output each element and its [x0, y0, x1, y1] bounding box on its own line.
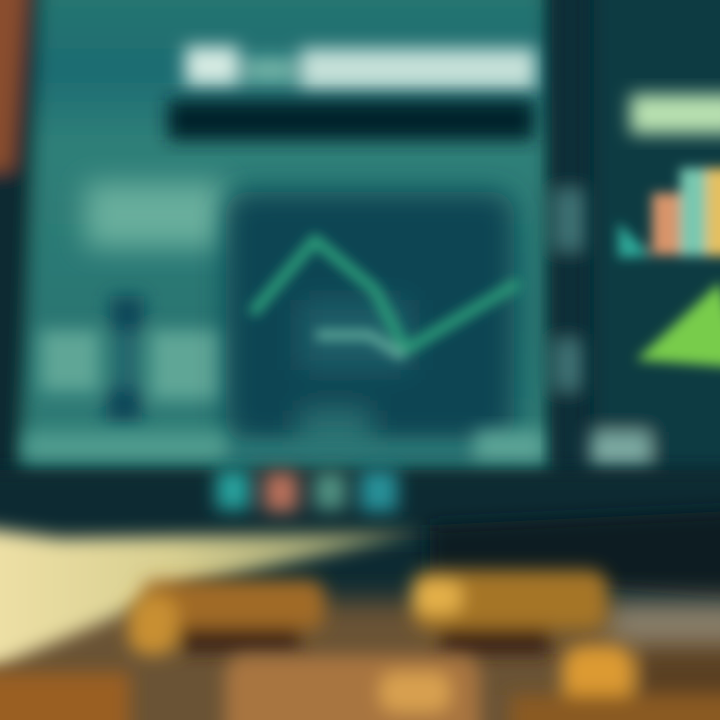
desk surface [0, 600, 720, 720]
coin stack right [412, 570, 608, 654]
dark desk behind coins [430, 510, 720, 600]
monitor bezel with coloured buttons [0, 470, 720, 540]
coin stack left [0, 580, 325, 720]
title placeholder bars [185, 46, 536, 90]
coins foreground [225, 645, 720, 720]
right heading [630, 94, 720, 134]
dark subtitle band [168, 100, 534, 140]
left lower panels [40, 296, 226, 422]
dark line chart panel [226, 192, 515, 442]
line chart trend [255, 240, 515, 355]
monitor divider [552, 0, 590, 470]
bottom caption strip [25, 430, 545, 464]
green area chart [636, 282, 720, 368]
paper sheet [0, 526, 425, 670]
left stat panel [85, 182, 225, 248]
gold coins [0, 570, 720, 720]
right screen [590, 0, 720, 470]
button dots [216, 470, 398, 512]
bar chart [618, 168, 720, 258]
